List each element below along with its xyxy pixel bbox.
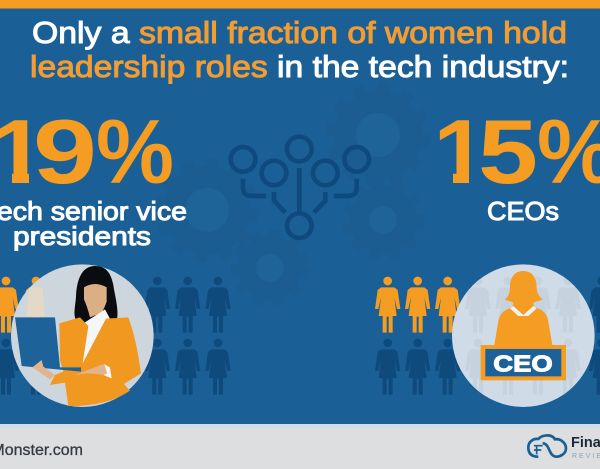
top orange bar [0,0,600,8]
illustration: businesswoman with laptop in circle [11,264,154,407]
CEO sign: CEO [493,351,553,377]
left label: tech senior vice presidents: presidents [13,221,151,251]
orange jacket [50,317,141,406]
right people grid: 3 orange, rest dark [375,277,600,395]
right label: CEOs: CEOs [487,196,559,226]
cuff [103,364,112,378]
footer band [0,424,600,469]
face and neck [84,284,107,317]
faded people behind [465,277,581,395]
footer brand text [571,435,600,460]
right statistic: 15% [440,120,600,184]
left statistic: 19%: 9 [33,102,97,203]
left label: tech senior vice presidents [0,196,187,251]
blouse [83,309,111,363]
hair [75,266,118,326]
laptop [15,317,81,372]
left statistic: 19% [0,120,172,184]
CEO sign [481,345,566,380]
icon: cloud logo [528,435,566,457]
background gears [161,89,424,302]
footer thin highlight [0,424,600,428]
hands [32,360,108,379]
right statistic: 15%: 1 [433,102,489,203]
title [30,15,569,84]
icon: network of connected nodes [231,137,369,238]
orange silhouette [494,271,553,347]
title: leadership roles in the tech industry: [30,49,569,84]
left people grid: 2 of 20 orange [0,277,231,395]
white collar [510,306,537,316]
illustration: CEO figure in circle [452,264,595,407]
faded figure behind [27,287,45,333]
right statistic: 15%: 5 [478,102,538,203]
left statistic: 19%: % [96,102,174,203]
title: Only a small fraction of women hold [32,15,567,50]
